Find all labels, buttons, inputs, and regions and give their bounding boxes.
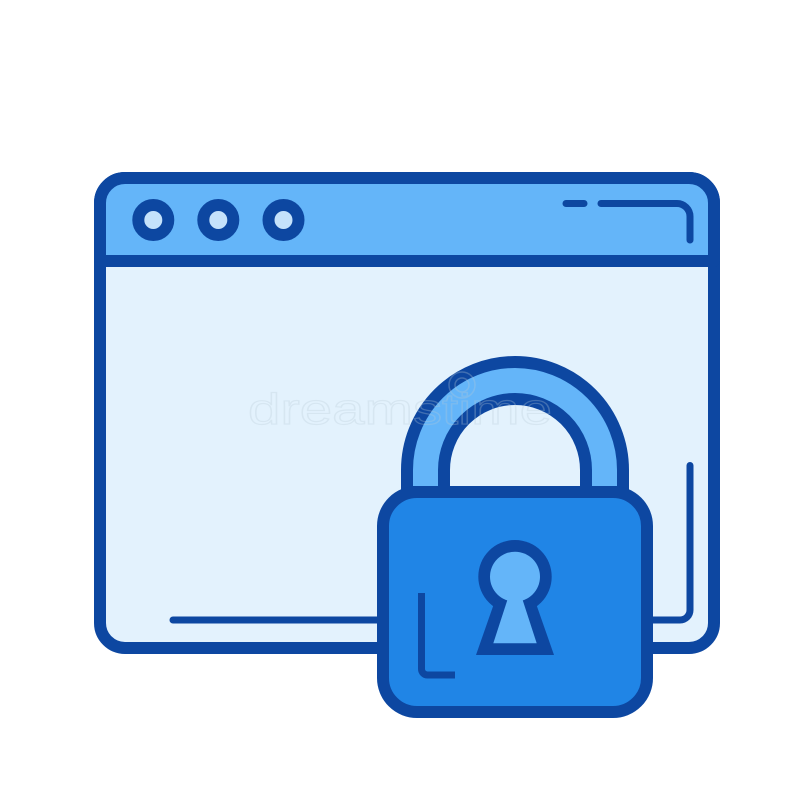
watermark <box>248 372 552 434</box>
window body highlight strokes <box>173 466 690 620</box>
padlock body <box>383 492 647 712</box>
icon: keyhole <box>476 540 554 655</box>
padlock highlight stroke <box>422 593 455 675</box>
padlock shackle <box>407 362 623 492</box>
title bar highlight strokes <box>566 204 690 240</box>
window title bar <box>100 178 714 261</box>
watermark: dreamstime <box>248 385 552 434</box>
panel: browser window <box>100 178 714 648</box>
icon: window control dots <box>138 205 298 235</box>
icon: padlock <box>383 362 647 712</box>
window body <box>100 178 714 648</box>
